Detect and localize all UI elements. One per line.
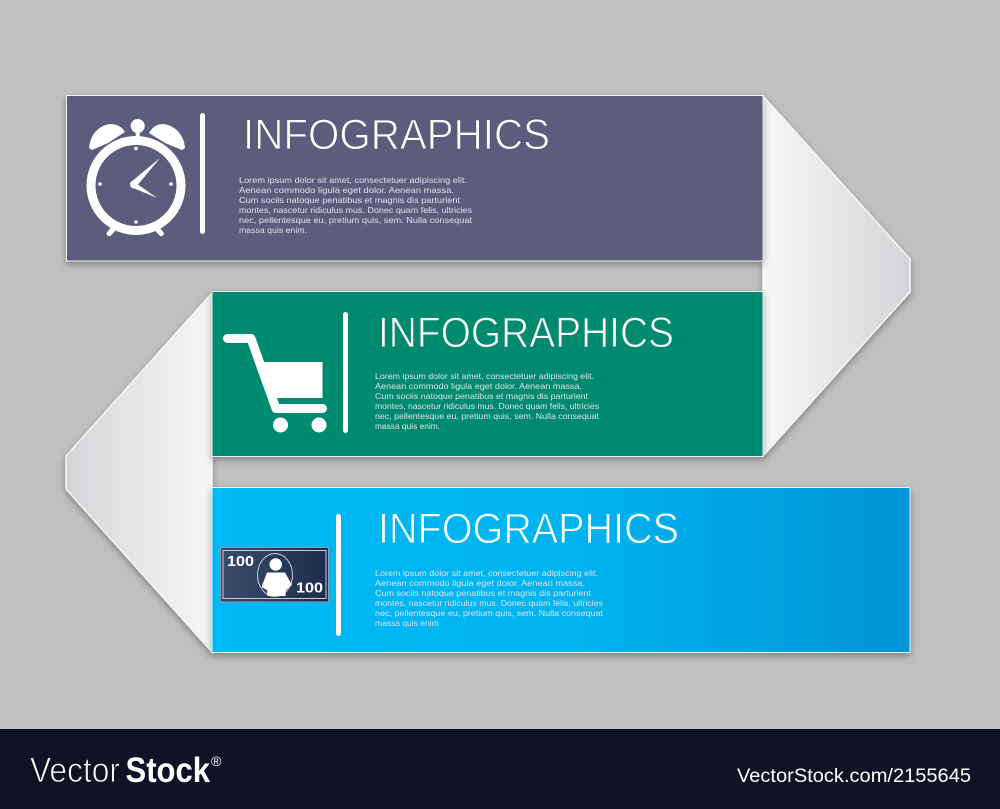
text block: Aenean commodo ligula eget dolor. Aenean massa. [375,578,585,588]
footer image id: VectorStock.com/2155645 [737,765,971,787]
text block: nec, pellentesque eu, pretium quis, sem. Nulla consequat [375,608,604,618]
right folded arrow connector [763,96,910,456]
text block: montes, nascetur ridiculus mus. Donec quam felis, ultricies [375,598,603,608]
text block: Lorem ipsum dolor sit amet, consectetuer adipiscing elit. [375,371,594,381]
heading: INFOGRAPHICS [378,506,679,553]
text block: Lorem ipsum dolor sit amet, consectetuer adipiscing elit. [239,175,467,185]
heading: INFOGRAPHICS [243,112,550,159]
text block: nec, pellentesque eu, pretium quis, sem. Nulla consequat [375,411,600,421]
footer logo: Vector [30,751,120,790]
text block: nec, pellentesque eu, pretium quis, sem. Nulla consequat [239,215,473,225]
divider bar [343,312,348,433]
left folded arrow connector [66,293,212,652]
text block: Aenean commodo ligula eget dolor. Aenean massa. [239,185,454,195]
text block [239,175,473,235]
footer logo [30,751,222,790]
text block: Aenean commodo ligula eget dolor. Aenean massa. [375,381,582,391]
panel: blue banknote [212,488,910,652]
text block: massa quis enim. [375,618,441,628]
text block: montes, nascetur ridiculus mus. Donec quam felis, ultricies [375,401,599,411]
divider bar [200,113,205,234]
text block: montes, nascetur ridiculus mus. Donec quam felis, ultricies [239,205,472,215]
text block: Lorem ipsum dolor sit amet, consectetuer adipiscing elit. [375,568,598,578]
divider bar [336,514,341,636]
text block: Cum sociis natoque penatibus et magnis dis parturient [375,588,592,598]
heading: INFOGRAPHICS [378,310,674,357]
footer logo: Stock [126,751,210,790]
footer logo: ® [211,753,222,769]
text block: Cum sociis natoque penatibus et magnis dis parturient [375,391,589,401]
text block [375,568,604,628]
icon: banknote: 100 [227,553,254,570]
icon: banknote [220,548,328,602]
text block: massa quis enim. [375,421,440,431]
text block: massa quis enim. [239,225,307,235]
footer bar [0,729,1000,809]
text block [375,371,600,431]
icon: banknote: 100 [296,580,323,597]
icon: shopping cart [228,338,326,432]
panel: green shopping cart [212,292,763,456]
text block: Cum sociis natoque penatibus et magnis dis parturient [239,195,461,205]
panel: purple alarm clock [66,96,763,261]
icon: alarm clock [89,119,185,236]
